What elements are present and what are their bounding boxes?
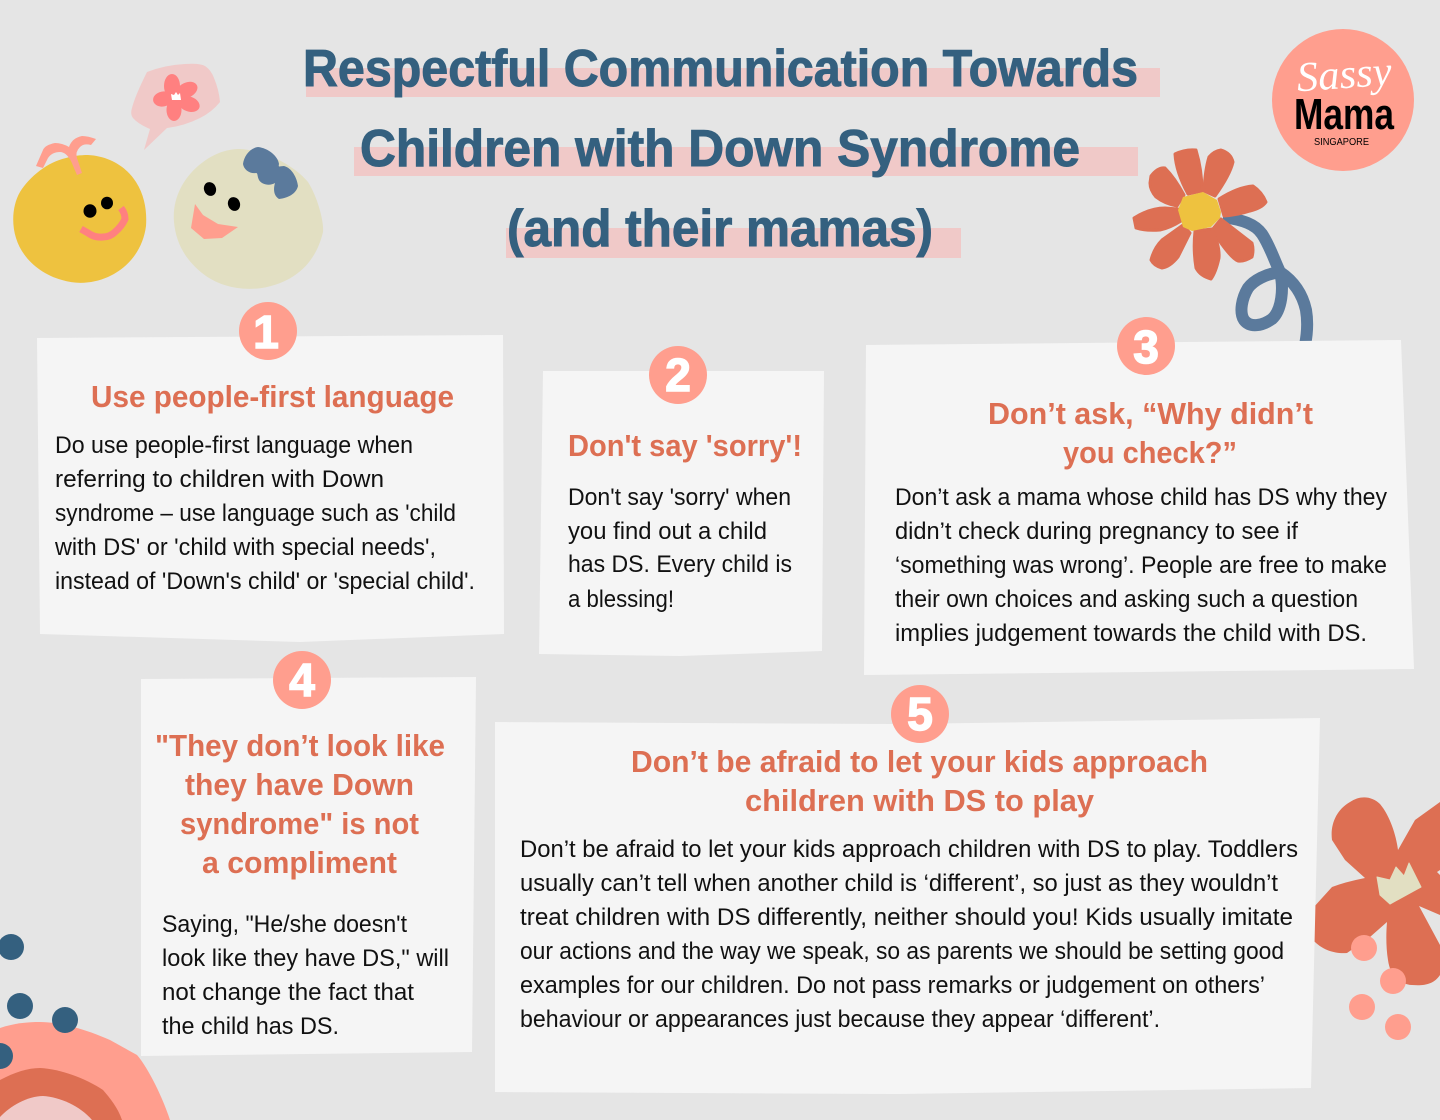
body text 2: Don't say 'sorry' when [568,484,791,511]
logo: Sassy Mama Singapore: Mama [1294,90,1394,139]
title: Respectful Communication Towards [303,40,1138,98]
body text 5: usually can’t tell when another child is ‘different’, so just as they wouldn’t [520,870,1278,897]
body text 4: the child has DS. [162,1013,339,1040]
heading 5 [631,744,1208,818]
heading 1: Use people-first language [91,379,454,414]
heading 5: children with DS to play [745,783,1095,818]
heading 2: Don't say 'sorry'! [568,428,802,463]
body text 2: a blessing! [568,586,674,613]
title: (and their mamas) [507,200,933,258]
body text 4: look like they have DS," will [162,945,449,972]
panel: tip 2 don't say sorry [539,346,824,656]
number badge 1 [239,302,297,360]
logo: Sassy Mama Singapore: SINGAPORE [1314,137,1369,148]
heading 3: you check?” [1063,435,1237,470]
body text 1: with DS' or 'child with special needs', [54,534,436,561]
body text 3: their own choices and asking such a question [895,586,1358,613]
panel: tip 5 let kids approach [495,685,1320,1094]
heading 4: syndrome" is not [180,806,419,841]
body text 1: referring to children with Down [55,466,384,493]
body text 5: behaviour or appearances just because they appear ‘different’. [520,1006,1160,1033]
heading 3: Don’t ask, “Why didn’t [988,396,1313,431]
heading 4 [155,728,445,880]
icon: speech bubble with flower [131,64,220,150]
body text 2: has DS. Every child is [568,551,792,578]
panel: tip 3 why didn't you check [864,317,1414,675]
icon: cream smiling character with bow [174,147,323,289]
number badge 5 [891,685,949,743]
heading 4: a compliment [202,845,397,880]
heading 4: they have Down [185,767,414,802]
heading 3 [988,396,1313,470]
number badge 2: 2 [665,349,691,401]
icon: yellow smiling character [13,136,146,283]
body text 2: you find out a child [568,518,767,545]
logo: Sassy Mama Singapore [1272,29,1414,171]
body text 4: Saying, "He/she doesn't [162,911,407,938]
number badge 2 [649,346,707,404]
panel: tip 4 not a compliment [141,651,476,1056]
heading 5: Don’t be afraid to let your kids approach [631,744,1208,779]
number badge 3: 3 [1133,321,1159,373]
icon: large orange flower, bottom right [1313,797,1440,1040]
title [303,40,1160,258]
body text 5: examples for our children. Do not pass remarks or judgement on others’ [520,972,1265,999]
icon: orange flower with blue stem [1134,150,1307,345]
body text 5: our actions and the way we speak, so as parents we should be setting good [520,938,1284,965]
body text 2 [568,484,792,613]
number badge 5: 5 [907,688,933,740]
body text 1: Do use people-first language when [55,432,413,459]
body text 5 [520,836,1298,1033]
number badge 4: 4 [289,654,315,706]
body text 1 [54,432,475,595]
body text 3: ‘something was wrong’. People are free to make [895,552,1387,579]
number badge 1: 1 [253,306,279,358]
body text 1: syndrome – use language such as 'child [55,500,456,527]
body text 1: instead of 'Down's child' or 'special child'. [55,568,475,595]
number badge 4 [273,651,331,709]
body text 3: Don’t ask a mama whose child has DS why they [895,484,1387,511]
number badge 3 [1117,317,1175,375]
panel: tip 1 people-first language [37,302,504,642]
body text 4 [162,911,449,1040]
heading 4: "They don’t look like [155,728,445,763]
body text 5: Don’t be afraid to let your kids approach children with DS to play. Toddlers [520,836,1298,863]
logo: Sassy Mama Singapore: Sassy [1295,49,1393,101]
body text 4: not change the fact that [162,979,414,1006]
body text 3 [895,484,1387,647]
body text 3: implies judgement towards the child with DS. [895,620,1367,647]
body text 3: didn’t check during pregnancy to see if [895,518,1298,545]
icon: rainbow and dots, bottom left [0,934,170,1120]
title: Children with Down Syndrome [360,120,1080,178]
body text 5: treat children with DS differently, neither should you! Kids usually imitate [520,904,1293,931]
